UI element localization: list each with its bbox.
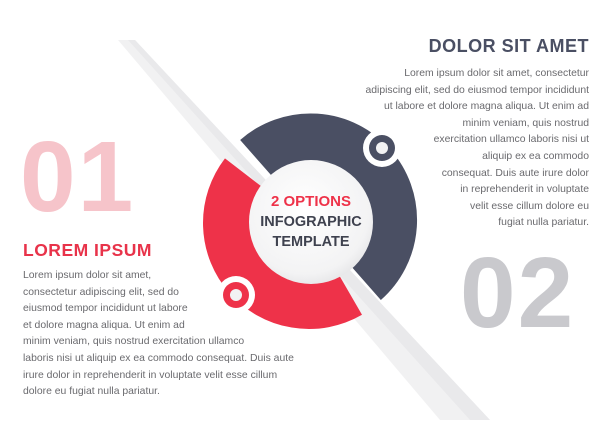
heading: dolor sit amet: DOLOR SIT AMET — [429, 36, 589, 56]
text block left: et dolore magna aliqua. Ut enim ad — [23, 320, 185, 331]
text block right: fugiat nulla pariatur. — [498, 217, 589, 228]
text block left: laboris nisi ut aliquip ex ea commodo consequat. Duis aute — [23, 353, 294, 364]
center circle: TEMPLATE — [272, 234, 350, 250]
red arc — [217, 173, 350, 314]
text block right: ut labore et dolore magna aliqua. Ut enim ad — [384, 101, 589, 112]
center circle: 2 OPTIONS — [271, 193, 351, 210]
text block right: minim veniam, quis nostrud — [463, 118, 589, 129]
number 01: 01 — [20, 121, 135, 233]
text block left — [23, 270, 294, 397]
text block right: aliquip ex ea commodo — [482, 151, 589, 162]
text block right: exercitation ullamco laboris nisi ut — [434, 134, 589, 145]
gray arc — [256, 129, 401, 282]
text block left: consectetur adipiscing elit, sed do — [23, 287, 179, 298]
text block left: dolore eu fugiat nulla pariatur. — [23, 386, 160, 397]
text block right — [365, 68, 589, 228]
text block left: irure dolor in reprehenderit in voluptate velit esse cillum — [23, 370, 277, 381]
icon: gray ring — [363, 129, 401, 167]
text block left: minim veniam, quis nostrud exercitation ullamco — [23, 336, 244, 347]
text block left: eiusmod tempor incididunt ut labore — [23, 303, 188, 314]
text block right: consequat. Duis aute irure dolor — [442, 168, 589, 179]
text block right: adipiscing elit, sed do eiusmod tempor incididunt — [365, 85, 589, 96]
heading: lorem ipsum: LOREM IPSUM — [23, 240, 152, 260]
icon: red ring — [217, 276, 255, 314]
text block right: in reprehenderit in voluptate — [460, 184, 589, 195]
number 02: 02 — [460, 237, 575, 349]
center circle — [249, 160, 373, 284]
text block right: velit esse cillum dolore eu — [470, 201, 589, 212]
center circle: INFOGRAPHIC — [260, 214, 362, 230]
text block right: Lorem ipsum dolor sit amet, consectetur — [404, 68, 589, 79]
text block left: Lorem ipsum dolor sit amet, — [23, 270, 151, 281]
